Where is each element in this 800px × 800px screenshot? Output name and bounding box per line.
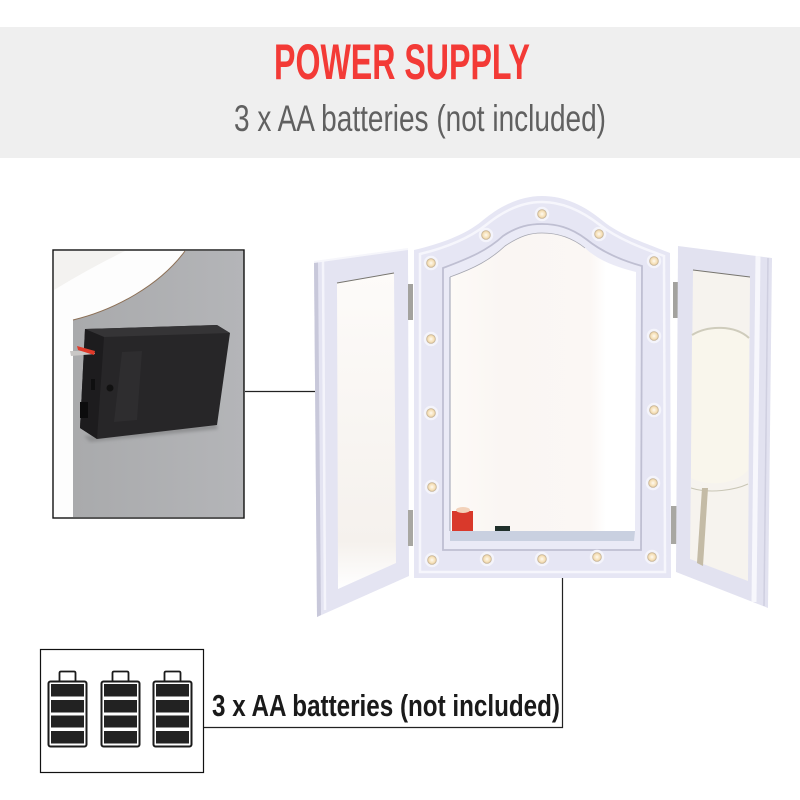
red candle reflection [452,507,473,531]
icon: battery 1 [48,672,86,746]
header band [0,27,800,158]
battery box [70,325,230,439]
right mirror door [676,246,772,608]
LED bulbs [425,208,660,566]
connector line: inset photo to mirror [245,390,315,392]
left mirror door [314,249,409,617]
left hinges [408,284,413,546]
small dark object reflection [495,526,510,531]
icon: battery 2 [102,672,140,746]
mirror glass [450,233,636,531]
right mirror glass with lamp reflection [690,270,750,581]
connector line: mirror to battery label [204,578,562,728]
right hinges [671,282,678,544]
title: POWER SUPPLY [274,34,530,90]
battery label: 3 x AA batteries (not included) [212,688,560,723]
icon: battery 3 [154,672,192,746]
inset photo: battery box on mirror back [53,250,245,518]
battery icons panel [40,650,204,772]
subtitle: 3 x AA batteries (not included) [234,98,606,139]
center arched mirror frame [414,196,671,578]
mirror shelf [450,531,635,541]
